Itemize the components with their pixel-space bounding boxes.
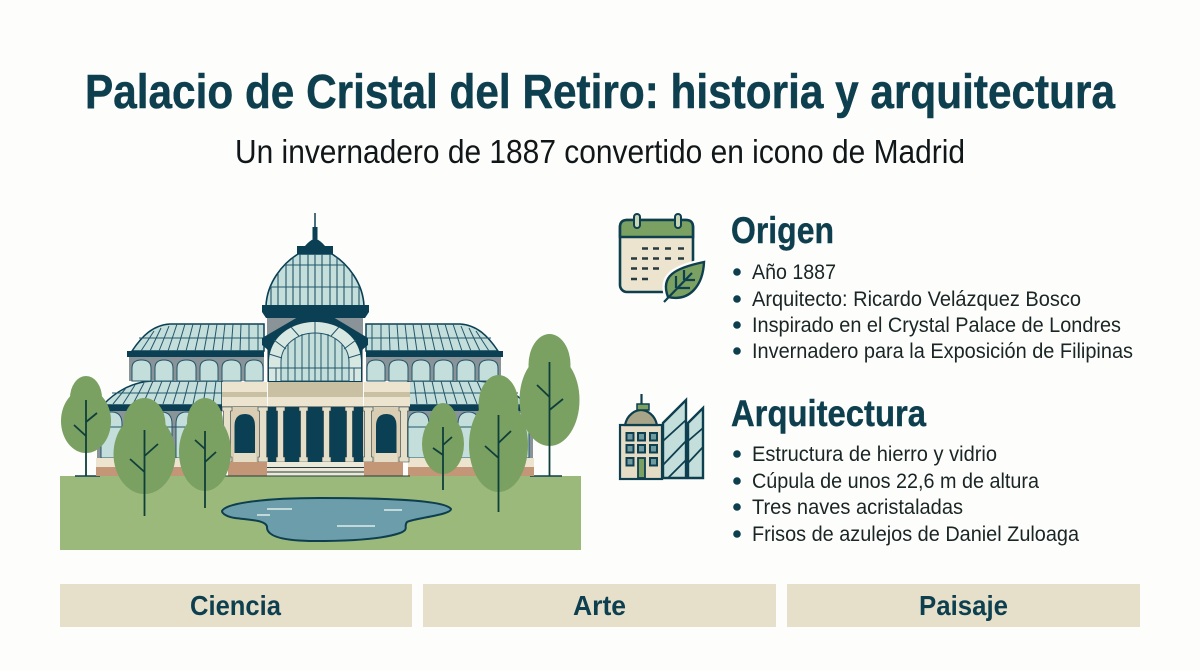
list: Arquitectura: Cúpula de unos 22,6 m de altura	[752, 470, 1039, 493]
heading: Arquitectura: Arquitectura	[731, 393, 926, 434]
band: Arte	[423, 584, 776, 627]
tree 4	[422, 403, 464, 490]
list: Arquitectura: Tres naves acristaladas	[752, 496, 963, 519]
band: Ciencia: Ciencia	[190, 590, 281, 621]
list: Origen: Invernadero para la Exposición de Filipinas	[752, 340, 1133, 363]
tree 3	[179, 398, 231, 508]
tree 6	[520, 334, 580, 476]
glass dome	[266, 213, 364, 306]
list: Arquitectura: Estructura de hierro y vidrio	[752, 443, 997, 466]
illustration: Palacio de Cristal	[60, 213, 581, 550]
entablature	[222, 382, 410, 407]
band: Paisaje	[787, 584, 1140, 627]
right wings	[366, 324, 534, 476]
band: Ciencia	[60, 584, 412, 627]
section: Origen	[731, 210, 1133, 363]
steps and brick base	[222, 462, 410, 476]
central arched facade	[262, 305, 369, 382]
list: Origen: Año 1887	[752, 261, 836, 284]
pond	[222, 498, 451, 541]
tree 2	[114, 398, 176, 516]
list: Origen	[733, 261, 1133, 363]
subtitle: Un invernadero de 1887 convertido en icono de Madrid	[235, 133, 965, 170]
left wings	[96, 324, 264, 476]
list: Origen: Inspirado en el Crystal Palace de Londres	[752, 314, 1121, 337]
icon: building and glass	[620, 394, 703, 479]
list: Arquitectura: Frisos de azulejos de Daniel Zuloaga	[752, 523, 1079, 546]
ground	[60, 476, 581, 550]
tree 5	[469, 375, 528, 512]
band: Paisaje: Paisaje	[919, 590, 1008, 621]
section: Arquitectura	[731, 393, 1079, 546]
icon: calendar with leaf	[620, 214, 704, 302]
list: Arquitectura	[733, 443, 1079, 546]
tree 1	[61, 376, 111, 476]
portico	[222, 407, 409, 462]
list: Origen: Arquitecto: Ricardo Velázquez Bosco	[752, 288, 1081, 311]
heading: Origen: Origen	[731, 210, 834, 251]
band: Arte: Arte	[573, 590, 626, 621]
